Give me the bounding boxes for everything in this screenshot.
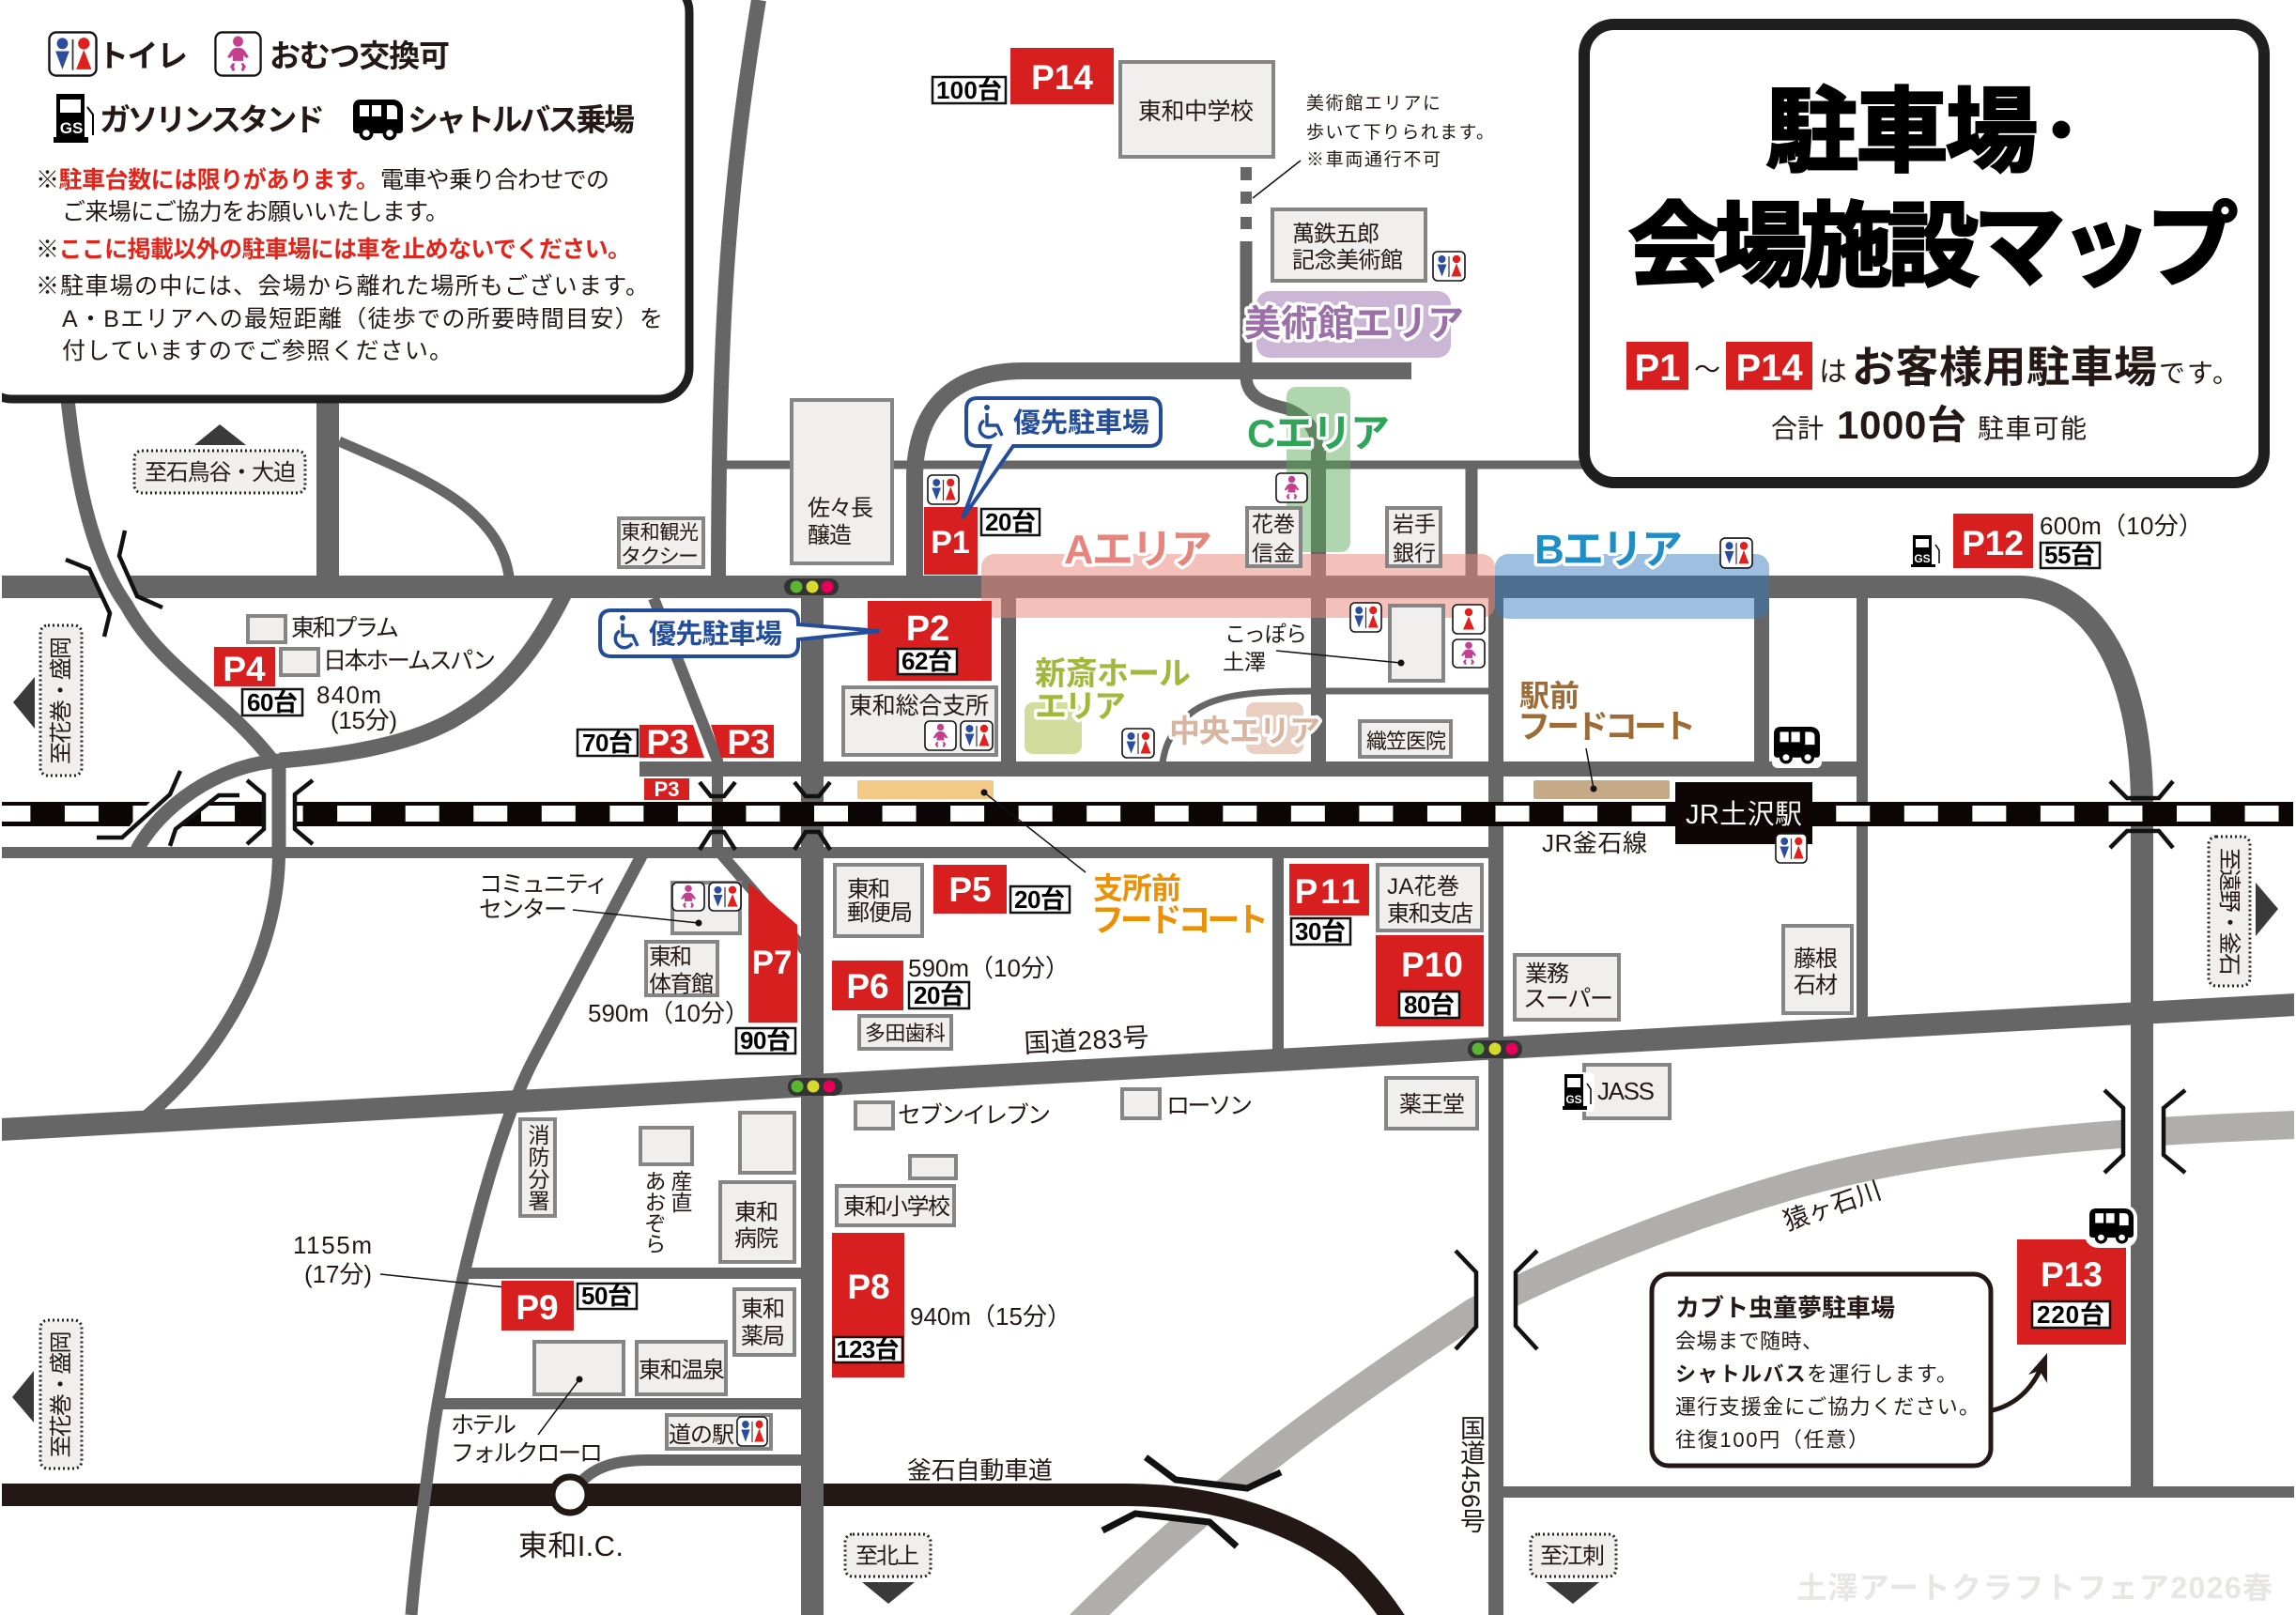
icon: gas station P12 [1911, 535, 1939, 567]
notice 1: ※駐車台数には限りがあります。 [36, 166, 379, 193]
building: 業務スーパー [1515, 955, 1619, 1020]
direction: 至江刺: 至江刺 [1540, 1544, 1605, 1569]
direction: 至北上: 至北上 [855, 1544, 919, 1569]
subtitle: total capacity: 1000台 [1837, 403, 1966, 447]
building: 東和観光タクシー: タクシー [621, 545, 699, 568]
building: 東和総合支所: 東和総合支所 [849, 693, 989, 719]
direction: 至遠野・釜石: 至遠野・釜石 [2216, 848, 2242, 976]
icon: diaper こっぽら [1453, 639, 1485, 668]
icon: toilet B area [1720, 538, 1752, 568]
icon: toilet 中央 [1122, 729, 1154, 758]
label: コミュニティセンター: センター [479, 897, 567, 923]
note: museum walking: 美術館エリアに [1306, 93, 1441, 114]
building: 東和体育館 [646, 942, 717, 997]
parking P10 [1376, 935, 1484, 1026]
building: 東和プラム: 東和プラム [291, 615, 399, 641]
traffic light: north [784, 578, 839, 595]
building: 岩手銀行: 銀行 [1393, 541, 1436, 565]
legend icon: diaper [215, 32, 261, 76]
building: 東和温泉 [637, 1342, 726, 1394]
building: 東和郵便局 [835, 865, 922, 936]
parking P9: P9 [516, 1288, 559, 1327]
legend text: shuttle bus: シャトルバス乗場 [408, 102, 635, 137]
direction: 至花巻・盛岡 upper: 至花巻・盛岡 [49, 637, 74, 764]
building: ローソン [1122, 1089, 1253, 1119]
building: blank [740, 1113, 794, 1173]
subtitle: P1 to P14: お客様用駐車場 [1852, 343, 2157, 392]
station: JR土沢駅: JR土沢駅 [1686, 799, 1802, 830]
parking P12 [1953, 512, 2203, 569]
building: 道の駅 [667, 1415, 771, 1449]
building: 東和病院 [720, 1182, 794, 1262]
parking P1 [924, 507, 1040, 575]
notice 3: ※駐車場の中には、会場から離れた場所もございます。 [36, 272, 649, 300]
callout: shuttle bus [1652, 1274, 1991, 1466]
area band: A [981, 554, 1495, 618]
parking P14: 100台 [936, 76, 1002, 104]
callout: shuttle bus: 運行支援金にご協力ください。 [1675, 1395, 1980, 1419]
title line 1: ・ [2030, 97, 2092, 166]
parking P4: 60台 [247, 688, 298, 716]
icon: toilet 総合支所 [961, 721, 993, 750]
parking P13: P13 [2041, 1255, 2103, 1294]
building: 産直あおぞら [640, 1128, 693, 1254]
direction: 至花巻・盛岡 upper [13, 625, 82, 776]
parking P6: P6 [846, 967, 889, 1006]
parking P14 [932, 48, 1114, 104]
building: 花巻信金: 花巻 [1252, 512, 1295, 536]
building: 東和プラム [248, 615, 399, 642]
icon: bus at P13 [2085, 1205, 2137, 1248]
label: 釜石自動車道: 釜石自動車道 [907, 1456, 1053, 1484]
icon: gas station JASS: GS [1565, 1093, 1582, 1106]
parking P7: P7 [752, 945, 792, 981]
callout: 優先駐車場 P2: 優先駐車場 [649, 619, 782, 650]
building: 東和体育館: 体育館 [649, 972, 714, 997]
dashed footpath to museum [1240, 167, 1252, 229]
label: ホテルフォルクローロ [451, 1412, 603, 1467]
area box: 中央 [1246, 702, 1303, 754]
building: 消防分署 [520, 1119, 555, 1216]
callout: shuttle bus: カブト虫童夢駐車場 [1675, 1294, 1895, 1322]
parking P5: 20台 [1014, 885, 1065, 914]
building: JA花巻東和支店: JA花巻 [1387, 874, 1459, 900]
legend text: gas station: ガソリンスタンド [100, 102, 325, 137]
food court bar: 支所前 [857, 780, 994, 799]
icon: bus at station [1772, 727, 1822, 768]
building: JA花巻東和支店 [1378, 865, 1482, 931]
building: 佐々長醸造: 醸造 [808, 523, 852, 548]
area band: B [1495, 554, 1769, 619]
food court label: 駅前 [1518, 679, 1696, 746]
notice 3 [36, 272, 663, 364]
parking P9: 1155m [293, 1231, 372, 1259]
building: JASS [1584, 1065, 1670, 1118]
building: ローソン: ローソン [1166, 1093, 1253, 1119]
traffic light: route 283 east [1468, 1040, 1522, 1058]
parking P9 [293, 1231, 637, 1330]
icon: toilet P1 [928, 475, 959, 504]
label: こっぽら土澤: こっぽら [1225, 622, 1307, 646]
traffic light: route 283 west [788, 1078, 842, 1096]
icon: diaper 総合支所 [925, 721, 956, 750]
panel: title [1584, 24, 2264, 483]
subtitle: P1 to P14: は [1819, 357, 1847, 388]
food court bar: 駅前 [1533, 780, 1670, 799]
parking P10: P10 [1401, 946, 1463, 984]
parking P6 [832, 954, 1070, 1010]
building: 多田歯科: 多田歯科 [865, 1022, 946, 1045]
building: 業務スーパー: スーパー [1523, 986, 1613, 1012]
note: museum walking: 歩いて下りられます。 [1306, 122, 1494, 143]
building: 多田歯科 [859, 1016, 951, 1049]
callout: shuttle bus: 往復100円（任意） [1675, 1428, 1869, 1452]
parking P13: 220台 [2037, 1300, 2104, 1329]
building: 東和観光タクシー [619, 518, 703, 568]
subtitle: P1 to P14: P1 [1635, 347, 1680, 389]
parking P2 [868, 601, 992, 681]
building: 東和郵便局: 郵便局 [847, 900, 913, 926]
area label: Cエリア: Cエリア [1247, 411, 1390, 455]
parking P7 [588, 883, 797, 1054]
parking P7: 90台 [740, 1026, 791, 1054]
building: 佐々長醸造: 佐々長 [808, 496, 873, 521]
building: JASS: JASS [1597, 1077, 1655, 1105]
callout: shuttle bus: シャトルバスを運行します。 [1675, 1362, 1957, 1386]
notice 1 [36, 166, 609, 225]
food court label: 駅前: 駅前 [1519, 679, 1579, 713]
station: JR土沢駅 [1675, 782, 1812, 844]
icon: gas station P12: GS [1914, 552, 1931, 565]
label: 国道283号: 国道283号 [1024, 1023, 1149, 1058]
building: 東和観光タクシー: 東和観光 [621, 522, 699, 544]
river: 猿ヶ石川 [1080, 1108, 2296, 1615]
notice 3: 付していますのでご参照ください。 [62, 338, 453, 364]
parking P8 [832, 1233, 1071, 1377]
building: こっぽら土澤 [1390, 606, 1443, 681]
label: 猿ヶ石川: 猿ヶ石川 [1780, 1177, 1885, 1236]
parking P5 [933, 865, 1070, 914]
parking P7: 590m（10分） [588, 999, 749, 1027]
parking P12: P12 [1962, 524, 2024, 562]
building: 産直あおぞら: 産直 [668, 1170, 693, 1213]
label: こっぽら土澤 [1223, 622, 1307, 674]
building: 業務スーパー: 業務 [1525, 961, 1569, 987]
food court label: 駅前: フードコート [1518, 709, 1696, 746]
food court label: 支所前 [1091, 871, 1269, 939]
label: 東和I.C.: 東和I.C. [518, 1530, 624, 1562]
parking P3: P3 [655, 777, 679, 801]
building: 薬王堂 [1386, 1078, 1477, 1129]
building: 花巻信金 [1247, 508, 1301, 566]
building: small annex [910, 1156, 956, 1178]
icon: toilet こっぽら [1350, 603, 1381, 632]
building: 東和総合支所 [843, 687, 996, 755]
notice 1: ご来場にご協力をお願いいたします。 [62, 199, 449, 225]
parking P9: (17分) [304, 1260, 372, 1288]
parking P4: 840m [316, 681, 381, 709]
legend icon: gas station [54, 94, 93, 143]
callout: 優先駐車場 P2 [600, 610, 880, 656]
area label: 中央エリア: 中央エリア [1169, 714, 1320, 748]
label: ホテルフォルクローロ: フォルクローロ [451, 1440, 603, 1467]
building: 藤根石材: 石材 [1794, 973, 1838, 998]
building: 萬鉄五郎記念美術館: 記念美術館 [1292, 248, 1403, 273]
building: 東和薬局 [734, 1289, 794, 1355]
parking P1: P1 [931, 525, 970, 561]
parking P10: 80台 [1404, 991, 1455, 1019]
building: 岩手銀行: 岩手 [1393, 512, 1436, 536]
building: 東和病院: 東和 [734, 1200, 778, 1225]
arrow: callout to P13 [1993, 1353, 2047, 1410]
callout: shuttle bus: 会場まで随時、 [1675, 1330, 1823, 1353]
legend icon: bus [353, 100, 403, 141]
notice 1: 電車や乗り合わせでの [380, 167, 609, 193]
building: 萬鉄五郎記念美術館: 萬鉄五郎 [1292, 222, 1379, 247]
building: 藤根石材 [1783, 926, 1852, 1013]
label: ホテルフォルクローロ: ホテル [451, 1412, 516, 1438]
building: ホテルフォルクローロ [534, 1342, 624, 1394]
parking P8: P8 [847, 1268, 890, 1306]
leader lines [380, 161, 1596, 1435]
parking P13 [2017, 1239, 2126, 1345]
direction: 至花巻・盛岡 lower [12, 1320, 82, 1469]
area label: Aエリア: Aエリア [1064, 527, 1212, 573]
parking P11 [1289, 864, 1369, 946]
road bridges over railway (left) [130, 802, 293, 826]
parking P3: P3 [727, 723, 770, 761]
label: 国道456号: 国道456号 [1456, 1415, 1486, 1533]
direction: 至石鳥谷・大迫: 至石鳥谷・大迫 [145, 460, 296, 485]
parking P4 [214, 647, 397, 734]
building: 東和中学校: 東和中学校 [1138, 99, 1254, 125]
title line 2: 会場施設マップ [1628, 194, 2238, 298]
label: こっぽら土澤: 土澤 [1223, 650, 1266, 674]
parking P2: 62台 [901, 647, 952, 675]
parking P11: P11 [1295, 872, 1363, 911]
parking P12: 600m（10分） [2040, 512, 2203, 540]
parking P12: 55台 [2044, 541, 2095, 569]
callout: 優先駐車場 P1: 優先駐車場 [1013, 408, 1149, 438]
parking P3: P3 [646, 723, 689, 761]
expressway: 釜石自動車道 [0, 1495, 1404, 1615]
parking P4: (15分) [331, 706, 397, 734]
direction: 至遠野・釜石 [2209, 837, 2278, 986]
parking P2: P2 [906, 609, 949, 649]
subtitle: P1 to P14: P14 [1735, 347, 1803, 389]
building: 佐々長醸造 [792, 400, 892, 563]
building: 東和温泉: 東和温泉 [639, 1358, 725, 1383]
parking P4: P4 [223, 650, 266, 688]
building: セブンイレブン: セブンイレブン [898, 1102, 1051, 1129]
parking P8: 940m（15分） [910, 1302, 1071, 1330]
area label: Bエリア: Bエリア [1534, 527, 1683, 573]
notice 3: A・Bエリアへの最短距離（徒歩での所要時間目安）を [62, 306, 663, 332]
building: 東和薬局: 薬局 [741, 1324, 785, 1349]
parking P3 [578, 723, 774, 801]
area box: 新斎ホール [1025, 702, 1082, 754]
food court label: 支所前: フードコート [1091, 902, 1269, 939]
parking P11: 30台 [1295, 917, 1346, 946]
note: museum walking [1306, 93, 1494, 170]
icon: women's toilet [1453, 605, 1485, 634]
parking P1: 20台 [985, 508, 1036, 536]
parking P14: P14 [1031, 58, 1093, 97]
parking P6: 20台 [914, 981, 964, 1009]
direction: 至北上 [845, 1534, 931, 1604]
direction: 至石鳥谷・大迫 [134, 424, 305, 493]
building: 花巻信金: 信金 [1252, 541, 1295, 565]
building: JA花巻東和支店: 東和支店 [1387, 901, 1473, 927]
area label: 新斎ホールエリア [1035, 656, 1191, 725]
subtitle: P1 to P14: です。 [2159, 359, 2239, 388]
label: コミュニティセンター: コミュニティ [479, 871, 609, 898]
parking P8: 123台 [836, 1335, 900, 1363]
legend icon: toilet [49, 32, 97, 76]
title line 1: 駐車場 [1766, 80, 2038, 183]
label: コミュニティセンター [479, 871, 609, 923]
icon: diaper community [672, 883, 704, 911]
area label: 新斎ホールエリア: エリア [1035, 689, 1126, 725]
building: 東和体育館: 東和 [649, 945, 692, 970]
label: JR釜石線: JR釜石線 [1542, 829, 1647, 857]
overpass roads [137, 761, 280, 853]
icon: toilet community [709, 883, 741, 911]
building: 東和小学校 [837, 1186, 954, 1225]
building: 岩手銀行 [1387, 508, 1441, 566]
building: 萬鉄五郎記念美術館 [1272, 209, 1425, 281]
area band: C [1287, 387, 1350, 552]
building: 薬王堂: 薬王堂 [1399, 1092, 1465, 1117]
icon: toilet museum [1433, 252, 1465, 281]
icon: toilet station [1776, 834, 1807, 863]
note: museum walking: ※車両通行不可 [1306, 149, 1441, 170]
building: 東和病院: 病院 [734, 1226, 778, 1252]
subtitle: total capacity [1771, 403, 2087, 447]
legend icon: gas station: GS [60, 119, 83, 137]
subtitle: total capacity: 駐車可能 [1978, 414, 2087, 443]
building: 藤根石材: 藤根 [1794, 946, 1838, 972]
parking P6: 590m（10分） [908, 954, 1070, 982]
subtitle: P1 to P14 [1626, 342, 2239, 392]
icon: gas station JASS [1561, 1072, 1595, 1112]
building: 東和小学校: 東和小学校 [843, 1194, 950, 1220]
parking P3: 70台 [582, 729, 633, 757]
building: 織笠医院 [1360, 721, 1451, 757]
building: 織笠医院: 織笠医院 [1366, 730, 1446, 753]
area band: 美術館 [1256, 291, 1451, 358]
area label: 美術館エリア: 美術館エリア [1244, 304, 1464, 345]
building: 東和中学校 [1120, 62, 1273, 157]
building: 消防分署: 消防分署 [525, 1124, 550, 1211]
building: 東和郵便局: 東和 [847, 877, 890, 902]
building: 日本ホームスパン: 日本ホームスパン [323, 648, 496, 674]
subtitle: total capacity: 合計 [1771, 414, 1824, 443]
direction: 至江刺 [1531, 1534, 1616, 1604]
callout: 優先駐車場 P1 [963, 398, 1161, 518]
watermark: 土澤アートクラフトフェア2026春 [1796, 1571, 2273, 1605]
building: 産直あおぞら: あおぞら [641, 1170, 666, 1254]
legend text: diaper: おむつ交換可 [270, 38, 450, 73]
bridge marks [66, 531, 2185, 1546]
legend text: toilet: トイレ [98, 38, 188, 73]
railway: JR釜石線 [0, 802, 2293, 826]
I.C. circle [552, 1477, 588, 1513]
building: コミュニティセンター [672, 883, 740, 933]
direction: 至花巻・盛岡 lower: 至花巻・盛岡 [49, 1331, 74, 1457]
icon: diaper 花巻 [1276, 473, 1307, 502]
area label: 新斎ホールエリア: 新斎ホール [1035, 656, 1191, 692]
parking P5: P5 [948, 870, 992, 909]
building: 道の駅: 道の駅 [669, 1423, 734, 1448]
food court label: 支所前: 支所前 [1093, 871, 1181, 905]
panel: legend and notices [0, 0, 689, 399]
icon: toilet 道の駅 [737, 1417, 767, 1446]
subtitle: P1 to P14: ～ [1694, 355, 1720, 384]
building: 東和薬局: 東和 [741, 1297, 785, 1322]
parking P9: 50台 [581, 1282, 632, 1310]
notice 2: ※ここに掲載以外の駐車場には車を止めないでください。 [36, 237, 631, 263]
